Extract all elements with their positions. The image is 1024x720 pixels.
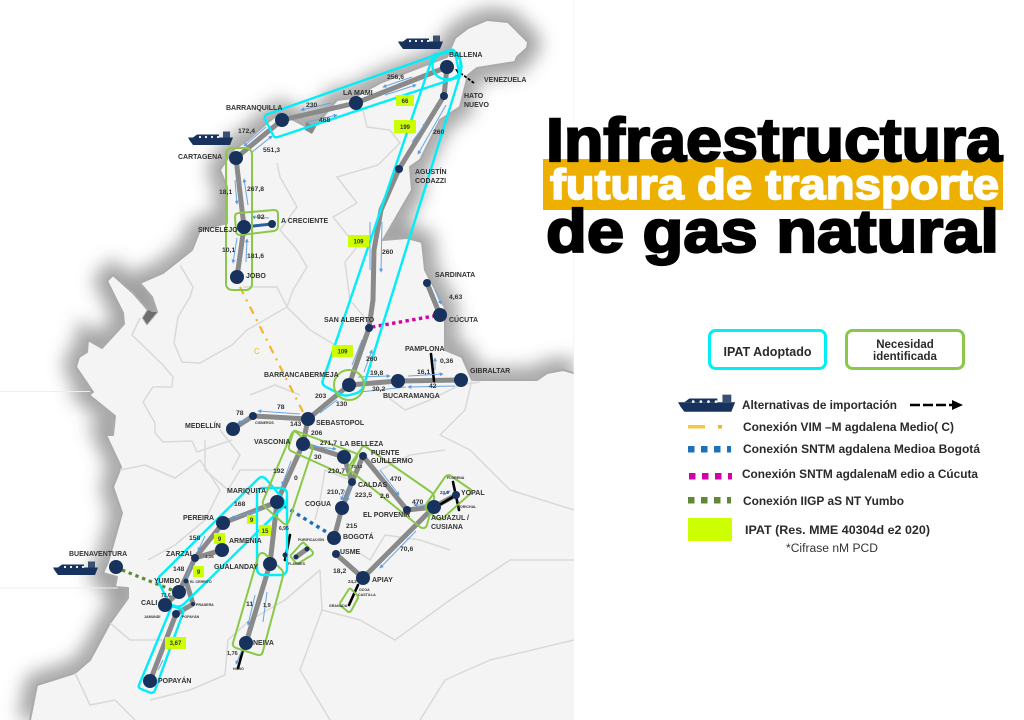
place names: FLORENA <box>447 476 465 480</box>
IPAT yellow-green tags: 3,67 <box>170 641 182 647</box>
place names: AGUSTÍN <box>415 167 446 176</box>
place names: MARIQUITA <box>227 488 266 495</box>
flow values: 11 <box>246 601 253 608</box>
new connection: SNT Magdalena Medio to Cúcuta <box>372 316 434 327</box>
flow values: 72,13 <box>351 464 363 469</box>
place names: GUILLERMO <box>371 458 414 465</box>
place names: PURIFICACIÓN <box>298 537 324 542</box>
flow values: 10,1 <box>222 247 235 254</box>
place names: GUALANDAY <box>214 564 258 571</box>
flow values: 168 <box>234 501 246 508</box>
icon: ship near Buenaventura <box>53 562 98 575</box>
title line 2: futura de transporte <box>550 161 999 209</box>
place names: BARRANQUILLA <box>226 105 282 112</box>
place names: JOBO <box>246 273 266 280</box>
place names: EL CERRITO <box>190 580 212 584</box>
flow values: 4,63 <box>449 294 462 301</box>
place names: BARRANCABERMEJA <box>264 372 339 379</box>
flow values: 78 <box>236 410 244 417</box>
place names: USME <box>340 549 361 556</box>
place names: AGUAZUL / <box>431 515 469 522</box>
flow values: 42 <box>429 383 437 390</box>
legend box: Necesidad identificada: Necesidad <box>876 339 934 351</box>
place names: ARMENIA <box>229 538 262 545</box>
place names: MEDELLÍN <box>185 421 221 430</box>
IPAT yellow-green tags <box>165 95 416 649</box>
place names: PUENTE <box>371 450 400 457</box>
pipeline nodes <box>109 60 468 688</box>
flow values: 0 <box>294 475 298 482</box>
flow values: 267,8 <box>247 186 264 193</box>
legend: import alternatives: Alternativas de importación <box>742 398 897 412</box>
legend: import alternatives <box>678 395 963 412</box>
flow values <box>161 74 462 657</box>
flow values: 18,2 <box>333 568 346 575</box>
new connection: SNT Magdalena Medio to Bogotá <box>284 506 328 533</box>
flow values: 6,95 <box>279 526 289 532</box>
highlight band behind the title <box>543 159 1003 210</box>
La Creciente branch <box>244 224 272 227</box>
place names: SINCELEJO <box>198 227 238 234</box>
map base: land and coastline <box>0 0 574 720</box>
place names: CÚCUTA <box>449 315 478 324</box>
legend: IIGP to Yumbo connection: Conexión IIGP aS NT Yumbo <box>743 494 904 508</box>
legend: IPAT swatch: IPAT (Res. MME 40304d e2 020) <box>745 523 930 537</box>
flow values: 1,9 <box>263 603 271 609</box>
place names: CALDAS <box>358 482 387 489</box>
flow values: 210,7 <box>328 468 345 475</box>
flow values: 24,2 <box>348 579 357 584</box>
legend box: IPAT Adoptado <box>710 330 826 368</box>
place names: LA BELLEZA <box>340 441 383 448</box>
footnote: *Cifrase nM PCD <box>786 543 878 555</box>
place names: SARDINATA <box>435 272 475 279</box>
flow values: 158 <box>189 535 201 542</box>
flow values: 230 <box>306 102 318 109</box>
place names: CASTILLA <box>358 593 376 597</box>
IPAT yellow-green tags: 9 <box>218 537 222 543</box>
flow values: 206 <box>311 430 323 437</box>
place names: POPAYÁN <box>158 676 191 685</box>
icon: ship near Cartagena <box>188 132 233 145</box>
import arrow from Venezuela <box>455 69 474 83</box>
place names: GRANADA <box>329 604 348 608</box>
flow values: 30,2 <box>372 386 385 393</box>
flow values: 210,7 <box>327 489 344 496</box>
flow values: 192 <box>273 468 285 475</box>
flow values: 260 <box>382 249 394 256</box>
place names: BUCARAMANGA <box>383 393 440 400</box>
place names <box>69 52 526 685</box>
flow values: 181,6 <box>247 253 264 260</box>
flow values: 271,7 <box>320 440 337 447</box>
flow values: 215 <box>346 523 358 530</box>
place names: COGUA <box>305 501 331 508</box>
new connection: IIGP to SNT Yumbo <box>122 570 172 590</box>
branch lines in black <box>238 354 459 668</box>
place names: NEIVA <box>253 640 274 647</box>
place names: NUEVO <box>464 102 489 109</box>
IPAT yellow-green tags: 9 <box>250 518 254 524</box>
legend: IPAT swatch <box>688 518 930 541</box>
title line 1: Infraestructura <box>546 106 1003 174</box>
flow values: 1,16 <box>205 554 214 559</box>
flow values: 260 <box>366 356 378 363</box>
place names: PAMPLONA <box>405 346 445 353</box>
flow values: 223,5 <box>355 492 372 499</box>
flow values: 130 <box>336 401 348 408</box>
new connection: VIM to Magdalena Medio <box>240 287 306 418</box>
identified need outlines in green <box>226 148 472 655</box>
place names: GIBRALTAR <box>470 368 510 375</box>
place names: VENEZUELA <box>484 77 526 84</box>
legend: VIM connection: Conexión VIM –M agdalena Medio( C) <box>743 420 954 434</box>
place names: PRADERA <box>196 603 214 607</box>
flow values: 260 <box>433 129 445 136</box>
flow values: 78 <box>277 404 285 411</box>
place names: CUSIANA <box>431 524 463 531</box>
flow values: 1,76 <box>227 651 238 657</box>
flow values: 70,6 <box>400 546 413 553</box>
place names: BALLENA <box>449 52 482 59</box>
flow values: 16,1 <box>417 369 430 376</box>
IPAT yellow-green tags: 109 <box>337 350 348 356</box>
flow values: 256,6 <box>387 74 404 81</box>
place names: CARTAGENA <box>178 154 222 161</box>
legend: SNT to Bogotá connection: Conexión SNTM agdalena Medioa Bogotá <box>743 442 980 456</box>
place names: CISNEROS <box>255 421 274 425</box>
IPAT yellow-green tags: 109 <box>353 240 364 246</box>
flow values: 470 <box>390 476 402 483</box>
flow values: 203 <box>315 393 327 400</box>
IPAT adopted outlines in cyan <box>139 50 462 693</box>
place names: CODAZZI <box>415 178 446 185</box>
place names: YOPAL <box>461 490 485 497</box>
legend: SNT to Cúcuta connection: Conexión SNTM agdalenaM edio a Cúcuta <box>742 467 978 481</box>
place names: VASCONIA <box>254 439 290 446</box>
flow values: 92 <box>257 214 265 221</box>
flow values: 143 <box>290 421 302 428</box>
place names: JAMUNDÍ <box>144 614 161 619</box>
legend box: Necesidad identificada <box>846 330 964 368</box>
title line 3: de gas natural <box>546 198 999 265</box>
place names: PEREIRA <box>183 515 214 522</box>
title <box>543 106 1003 265</box>
IPAT yellow-green tags: 66 <box>402 99 409 105</box>
place names: LA MAMI <box>343 90 373 97</box>
place names: POPAYÁN <box>182 614 200 619</box>
flow values: 172,4 <box>238 128 255 135</box>
flow values: 30 <box>314 454 322 461</box>
place names: BOGOTÁ <box>343 532 374 541</box>
place names: OCOA <box>359 588 370 592</box>
flow values: 470 <box>412 499 424 506</box>
place names: BUENAVENTURA <box>69 551 127 558</box>
flow values: 148 <box>173 566 185 573</box>
place names: CALI <box>141 600 157 607</box>
flow direction arrows <box>158 77 455 670</box>
flow values: 73,6 <box>161 593 171 599</box>
place names: ZARZAL <box>166 551 195 558</box>
place names: A CRECIENTE <box>281 218 329 225</box>
IPAT yellow-green tags: 15 <box>262 529 269 535</box>
new connection: VIM to Magdalena Medio: C <box>254 347 260 356</box>
place names: HOBO <box>233 667 244 671</box>
place names: APIAY <box>372 577 393 584</box>
flow values: 0,36 <box>440 358 453 365</box>
place names: YUMBO <box>154 578 181 585</box>
place names: MORICHAL <box>457 505 477 509</box>
IPAT yellow-green tags: 199 <box>400 125 411 131</box>
flow values: 18,1 <box>219 189 232 196</box>
legend box: Necesidad identificada: identificada <box>873 351 938 363</box>
place names: FLANDES <box>288 562 306 566</box>
place names: SEBASTOPOL <box>316 420 365 427</box>
place names: HATO <box>464 93 484 100</box>
icon: ship near Ballena <box>398 36 443 49</box>
flow values: 551,3 <box>263 147 280 154</box>
legend box: IPAT Adoptado: IPAT Adoptado <box>724 345 812 359</box>
place names: EL PORVENIR <box>363 512 410 519</box>
gas pipelines <box>150 67 461 681</box>
flow values: 468 <box>319 117 331 124</box>
place names: SAN ALBERTO <box>324 317 375 324</box>
flow values: 2,6 <box>380 493 390 500</box>
flow values: 23,9 <box>440 490 449 495</box>
flow values: 19,8 <box>370 370 383 377</box>
IPAT yellow-green tags: 9 <box>197 570 201 576</box>
